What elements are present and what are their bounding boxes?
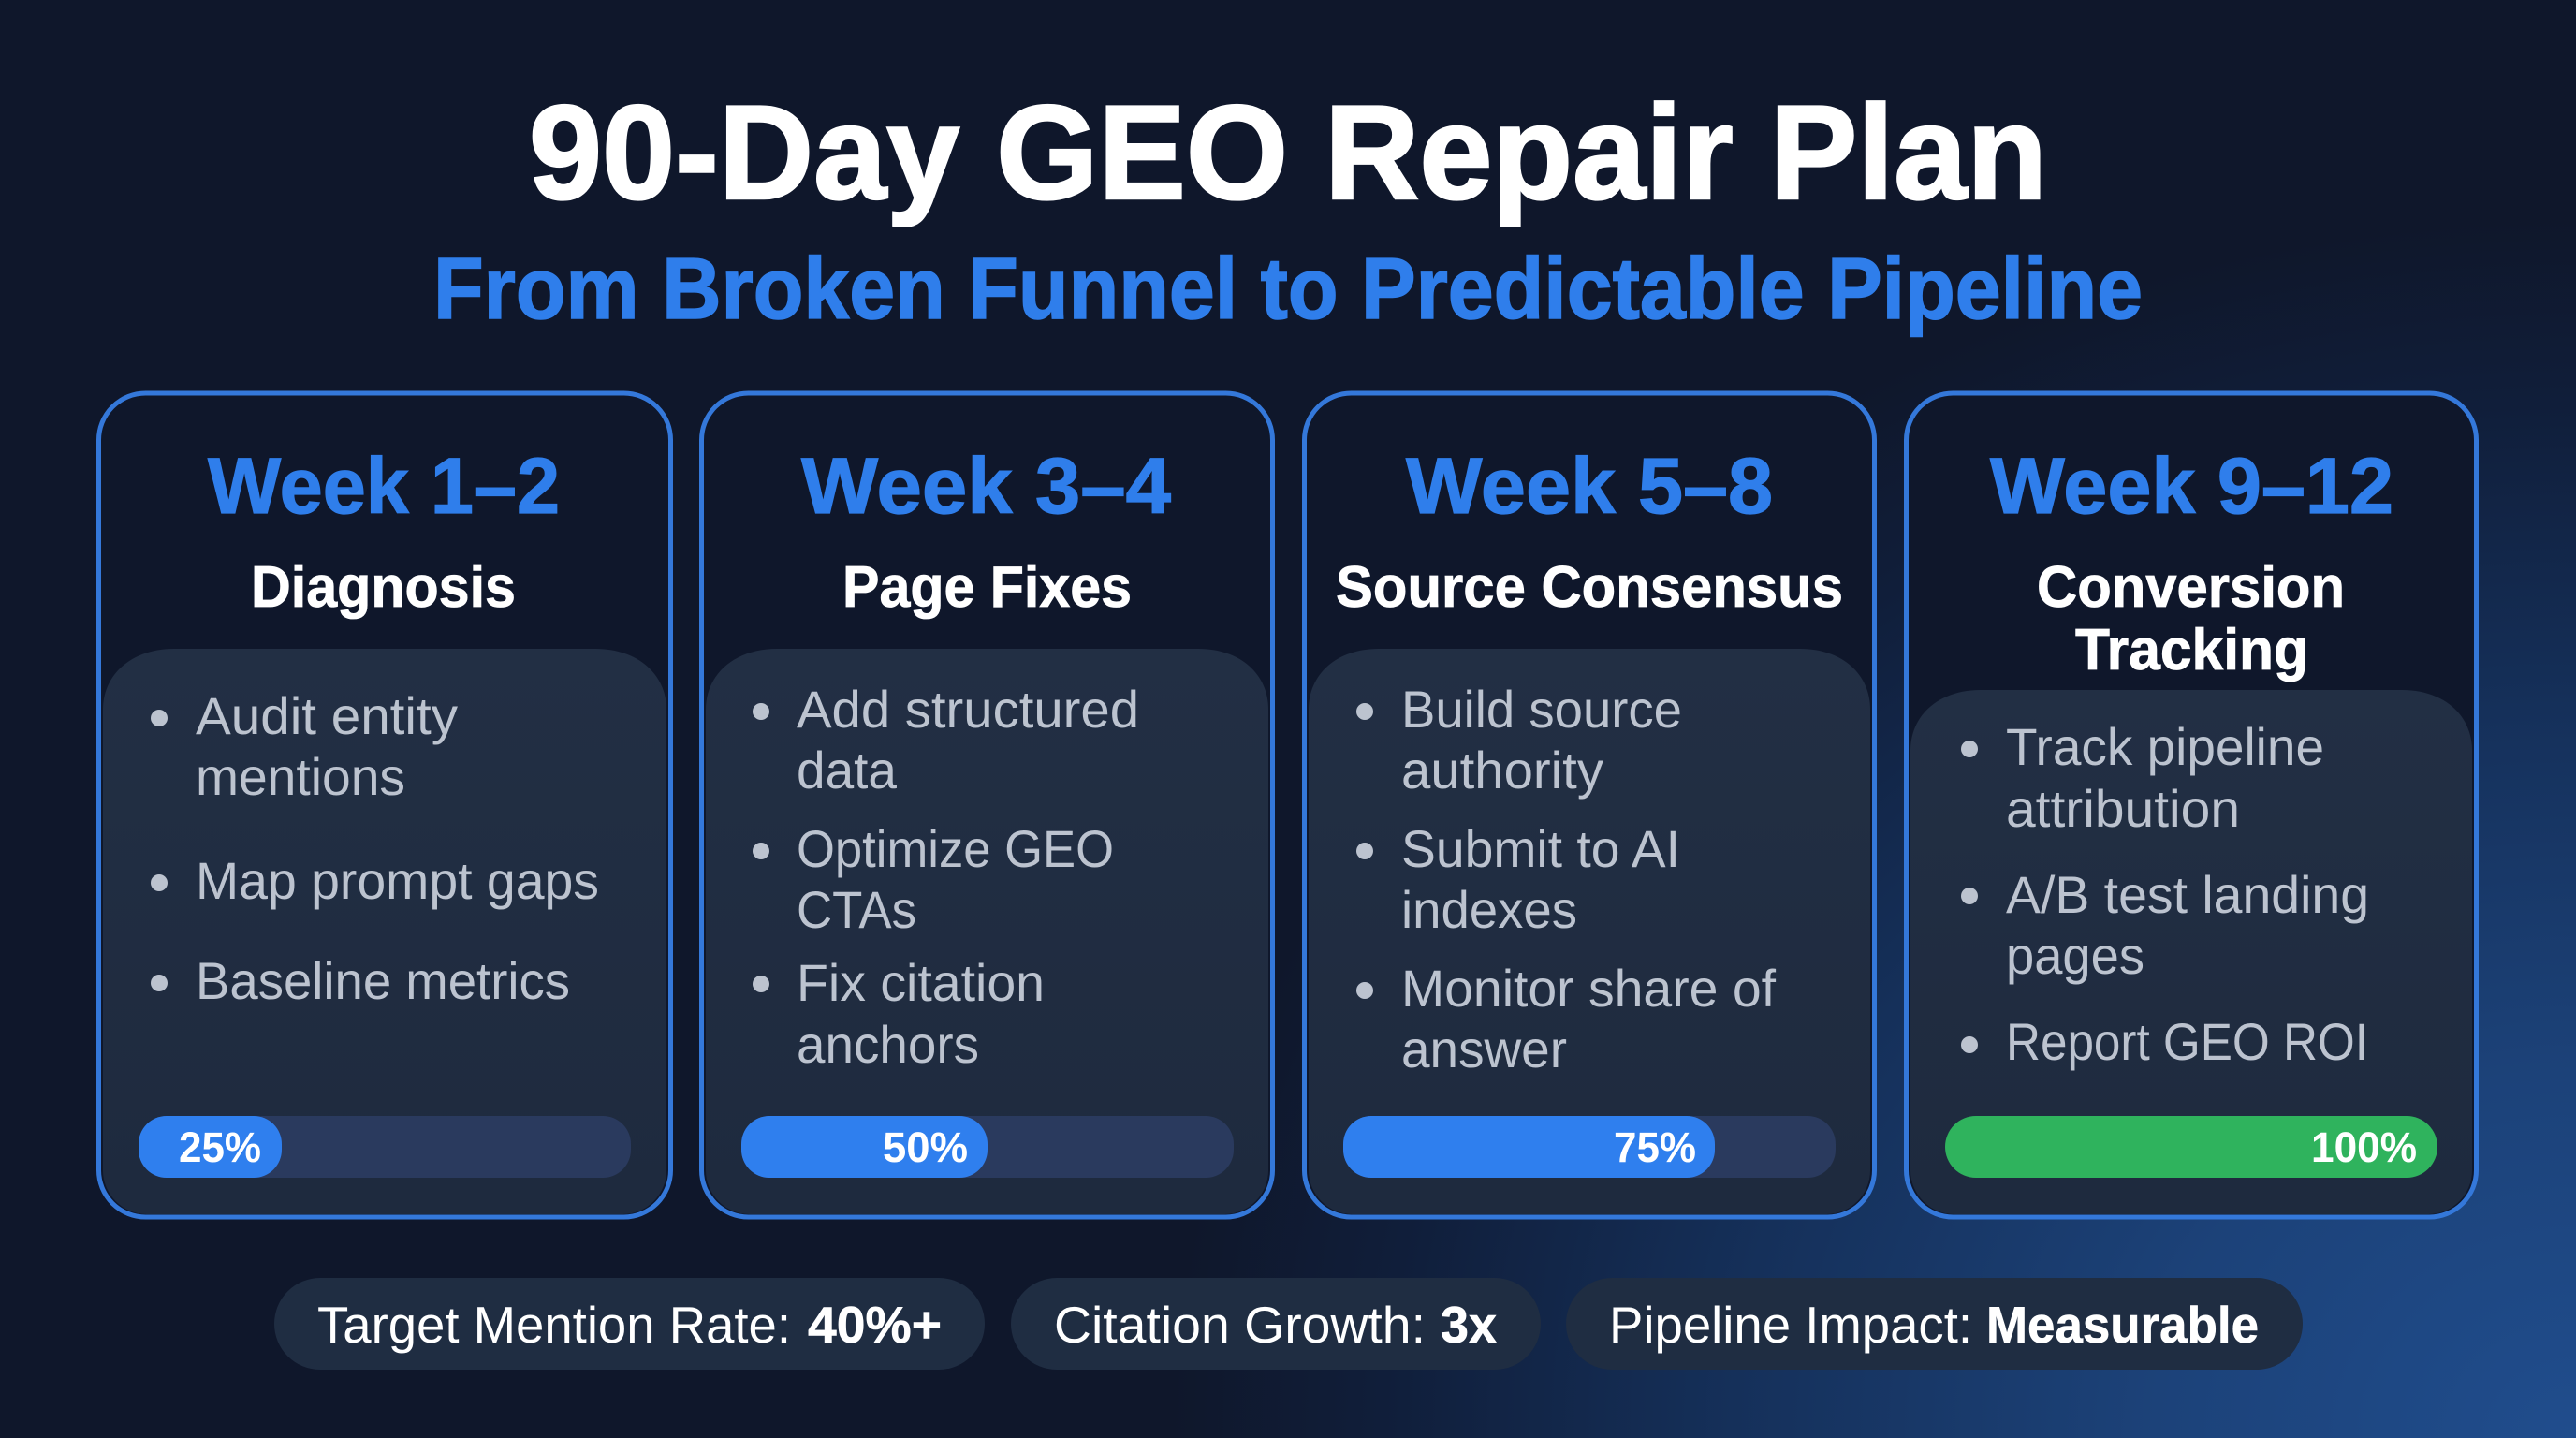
stat pill: target mention rate: Target Mention Rate: bbox=[317, 1296, 791, 1354]
bullet list: week 9-12: A/B test landing bbox=[2006, 865, 2369, 924]
bullet list: week 5-8 bbox=[1356, 680, 1776, 1078]
bullet list: week 1-2: mentions bbox=[196, 747, 405, 806]
progress bar: 100%: 100% bbox=[2311, 1123, 2417, 1171]
stat pill: citation growth: Citation Growth: bbox=[1054, 1296, 1426, 1354]
bullet list: week 1-2 bbox=[151, 686, 599, 1010]
stat pill: citation growth: 3x bbox=[1441, 1296, 1497, 1354]
progress bar: 100% bbox=[1945, 1116, 2437, 1178]
bullet list: week 3-4: Add structured bbox=[797, 680, 1139, 739]
bullet list: week 5-8: authority bbox=[1401, 741, 1603, 800]
subtitle: From Broken Funnel to Predictable Pipeline bbox=[433, 240, 2143, 337]
progress bar: 75%: 75% bbox=[1614, 1123, 1696, 1171]
stat pill: pipeline impact: Pipeline Impact: bbox=[1609, 1296, 1972, 1354]
bullet list: week 9-12: Track pipeline bbox=[2006, 717, 2324, 776]
bullet list: week 1-2: Baseline metrics bbox=[196, 951, 570, 1010]
bullet list: week 5-8: answer bbox=[1401, 1020, 1567, 1078]
stat pill: target mention rate: 40%+ bbox=[808, 1296, 942, 1354]
bullet list: week 3-4: Fix citation bbox=[797, 953, 1045, 1012]
bullet list: week 5-8: indexes bbox=[1401, 880, 1577, 939]
heading: diagnosis: Diagnosis bbox=[251, 555, 516, 620]
bullet list: week 3-4 bbox=[753, 680, 1139, 1074]
bullet list: week 3-4: anchors bbox=[797, 1015, 979, 1074]
panel: week 3-4 page fixes bbox=[702, 393, 1273, 1217]
panel: week 3-4 task list bbox=[706, 649, 1268, 1214]
bullet list: week 5-8: Monitor share of bbox=[1401, 959, 1776, 1018]
panel: week 9-12 task list bbox=[1910, 690, 2472, 1214]
progress bar: 50% bbox=[741, 1116, 1234, 1178]
bullet list: week 5-8: Submit to AI bbox=[1401, 819, 1680, 878]
stat pill: pipeline impact bbox=[1566, 1278, 2303, 1370]
bullet list: week 5-8: Build source bbox=[1401, 680, 1682, 739]
heading: week 1-2: Week 1–2 bbox=[208, 442, 560, 530]
progress bar: 25% bbox=[139, 1116, 631, 1178]
heading: page fixes: Page Fixes bbox=[842, 555, 1132, 620]
panel: week 5-8 source consensus bbox=[1305, 393, 1874, 1217]
bullet list: week 1-2: Audit entity bbox=[196, 686, 458, 745]
bullet list: week 9-12: pages bbox=[2006, 926, 2144, 985]
heading: week 9-12: Week 9–12 bbox=[1990, 442, 2393, 530]
heading: conversion tracking: Tracking bbox=[2075, 618, 2308, 682]
heading: week 5-8: Week 5–8 bbox=[1406, 442, 1773, 530]
progress bar: 75% bbox=[1343, 1116, 1836, 1178]
bullet list: week 3-4: data bbox=[797, 741, 898, 800]
panel: week 5-8 task list bbox=[1309, 649, 1870, 1214]
progress bar: 25%: 25% bbox=[179, 1123, 261, 1171]
stat pill: pipeline impact: Measurable bbox=[1986, 1296, 2259, 1354]
panel: week 1-2 task list bbox=[103, 649, 666, 1214]
bullet list: week 3-4: Optimize GEO bbox=[797, 819, 1114, 878]
panel: week 9-12 conversion tracking bbox=[1906, 393, 2477, 1217]
title: 90-Day GEO Repair Plan bbox=[529, 79, 2047, 227]
heading: conversion tracking bbox=[2037, 555, 2345, 682]
panel: week 1-2 diagnosis bbox=[99, 393, 670, 1217]
bullet list: week 9-12 bbox=[1961, 717, 2369, 1071]
heading: week 3-4: Week 3–4 bbox=[801, 442, 1171, 530]
heading: source consensus: Source Consensus bbox=[1336, 555, 1843, 620]
bullet list: week 1-2: Map prompt gaps bbox=[196, 851, 599, 910]
bullet list: week 9-12: Report GEO ROI bbox=[2006, 1012, 2368, 1071]
stat pill: citation growth bbox=[1011, 1278, 1541, 1370]
bullet list: week 9-12: attribution bbox=[2006, 779, 2240, 838]
heading: conversion tracking: Conversion bbox=[2037, 555, 2345, 620]
progress bar: 50%: 50% bbox=[883, 1123, 968, 1171]
bullet list: week 3-4: CTAs bbox=[797, 880, 916, 939]
stat pill: target mention rate bbox=[274, 1278, 985, 1370]
